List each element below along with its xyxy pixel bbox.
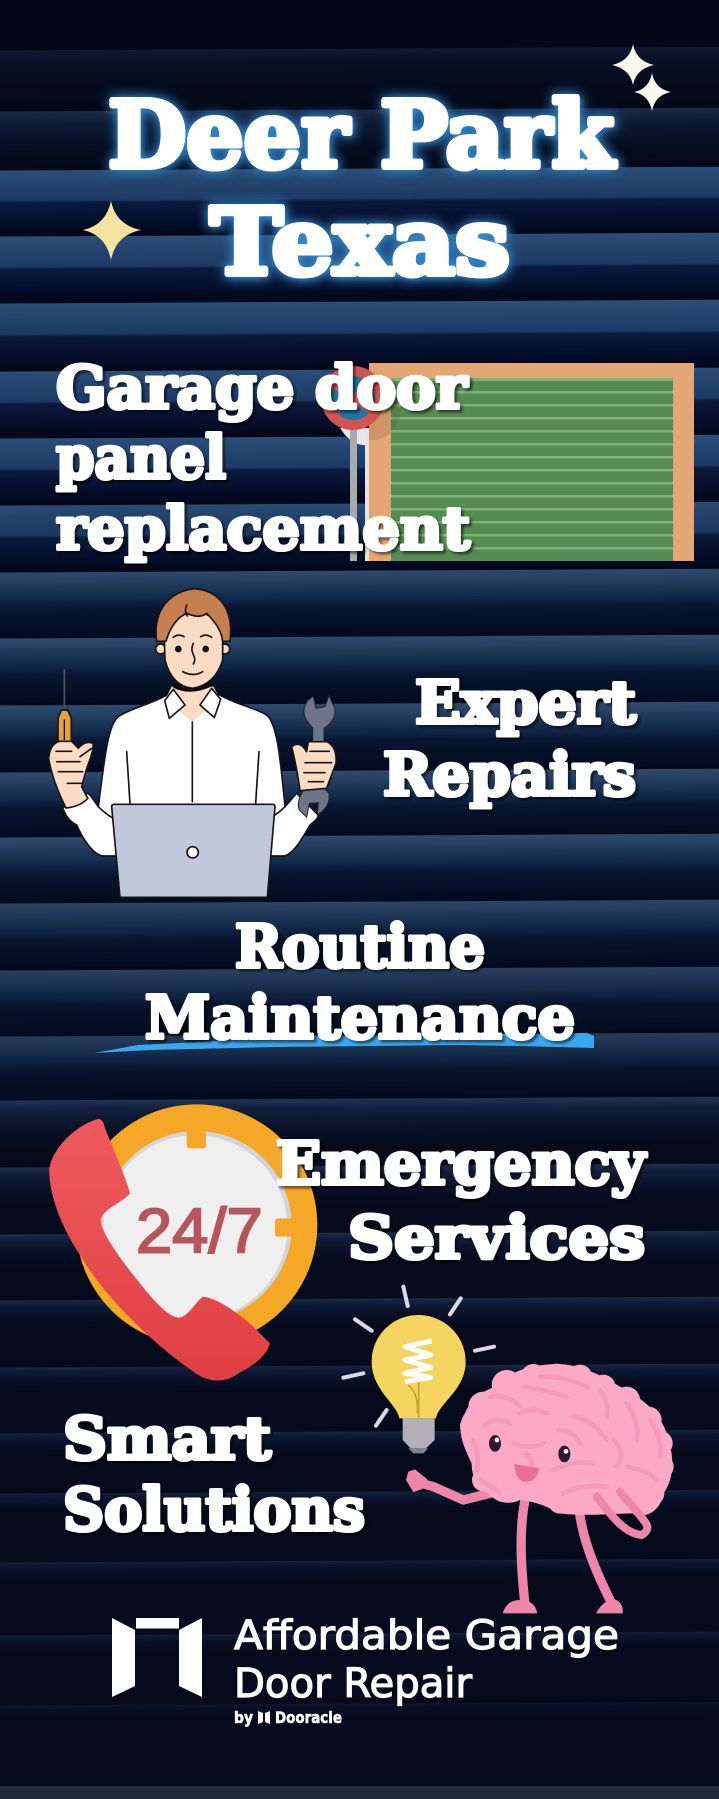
collar (165, 688, 221, 718)
underline brush stroke (94, 1033, 594, 1053)
illustration: garage door with sign (321, 363, 694, 561)
head (156, 589, 231, 688)
left hand (49, 741, 93, 808)
heading: Emergency Services: Emergency (276, 1129, 647, 1198)
laptop (112, 804, 275, 897)
heading: Expert Repairs (383, 668, 636, 809)
heading: Garage door panel replacement: Garage door (56, 353, 468, 422)
sign pole (340, 428, 368, 445)
heading: Garage door panel replacement: panel (56, 423, 226, 492)
icon: sparkle white small (634, 73, 671, 111)
door frame (369, 363, 694, 561)
brain limbs (415, 1482, 612, 1605)
heading: Smart Solutions (63, 1404, 365, 1544)
heading: Garage door panel replacement (56, 353, 470, 563)
logo mark: open door (112, 1618, 202, 1697)
sign (321, 366, 385, 430)
heading: Smart Solutions: Smart (63, 1404, 271, 1473)
logo text: by (234, 1708, 253, 1727)
logo text: Door Repair (234, 1661, 473, 1707)
light bulb (372, 1315, 466, 1453)
heading: Garage door panel replacement: replacement (56, 494, 470, 563)
icon: sparkle yellow (83, 201, 141, 260)
neck (165, 687, 221, 722)
icon: screwdriver (58, 669, 71, 741)
heading: Smart Solutions: Solutions (63, 1475, 365, 1544)
icon: wrench (298, 695, 335, 817)
logo text: Affordable Garage (234, 1613, 619, 1659)
brain right arm (597, 1492, 647, 1535)
logo text: Dooracle (275, 1708, 342, 1727)
brain body (460, 1364, 674, 1517)
heading: Expert Repairs: Expert (415, 668, 636, 737)
heading: Emergency Services (276, 1129, 647, 1272)
heading: Routine Maintenance: Routine (235, 912, 485, 981)
logo text (234, 1613, 619, 1727)
phone receiver (49, 1119, 270, 1381)
title: Deer Park (108, 81, 616, 189)
right hand (292, 742, 336, 791)
light rays (343, 1287, 494, 1426)
heading: Routine Maintenance (145, 912, 575, 1052)
icon: 24/7 phone clock (49, 1104, 317, 1381)
illustration: brain with light bulb (343, 1287, 674, 1613)
shirt (63, 695, 318, 856)
heading: Emergency Services: Services (348, 1203, 645, 1272)
heading: Routine Maintenance: Maintenance (145, 983, 575, 1052)
brain face (489, 1435, 570, 1482)
clock face (76, 1104, 317, 1346)
illustration: repairman with tools and laptop (49, 589, 336, 897)
icon: sparkle white large (612, 44, 654, 85)
title (108, 81, 616, 296)
door panels (391, 378, 673, 561)
label: 24/7: 24/7 (136, 1196, 263, 1266)
title: Texas (210, 188, 510, 296)
heading: Expert Repairs: Repairs (383, 740, 636, 809)
